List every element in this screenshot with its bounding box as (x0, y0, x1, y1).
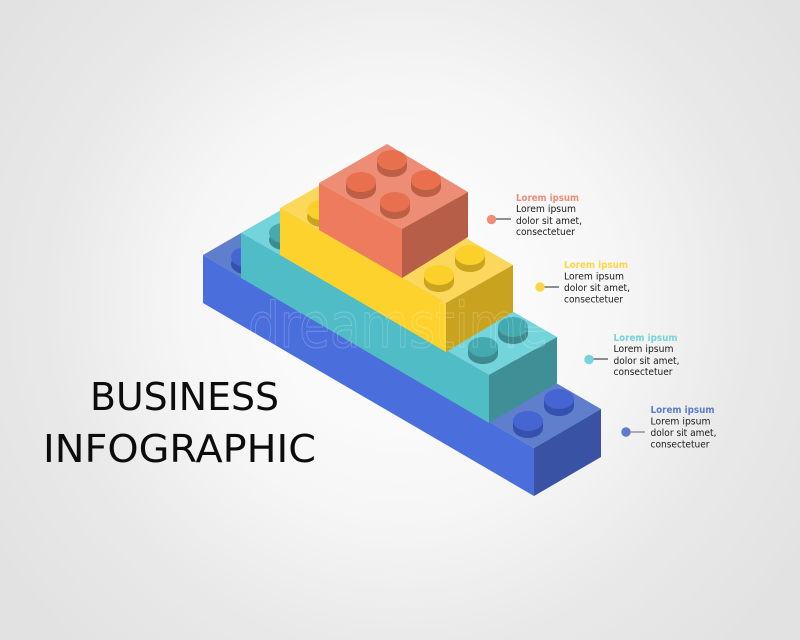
text: teal label: Lorem ipsum (614, 333, 678, 344)
stud: blue front (513, 411, 543, 438)
stud: orange right (411, 170, 441, 197)
text: yellow label: Lorem ipsum (564, 260, 628, 271)
watermark: dreamstime (248, 289, 548, 362)
text: yellow label: Lorem ipsum (564, 272, 624, 282)
stud: orange front (380, 192, 410, 219)
label: orange (487, 193, 582, 238)
text: blue label: Lorem ipsum (650, 405, 714, 416)
title: INFOGRAPHIC (43, 427, 316, 472)
brick: blue base (203, 217, 601, 496)
marker: blue (621, 427, 645, 437)
stud: orange left (346, 172, 376, 199)
stud: teal front (468, 337, 498, 364)
text: blue label: consectetuer (650, 440, 710, 450)
text: orange label: Lorem ipsum (516, 193, 579, 204)
text: orange label: Lorem ipsum (516, 204, 576, 215)
brick: teal (241, 194, 557, 423)
text: blue label: dolor sit amet, (650, 428, 716, 439)
text: teal label: Lorem ipsum (614, 344, 674, 355)
text: blue label (650, 405, 716, 450)
marker: orange (487, 215, 511, 224)
brick: yellow (280, 170, 513, 352)
text: teal label: dolor sit amet, (614, 356, 680, 367)
title (43, 375, 316, 472)
infographic canvas (46, 5, 716, 594)
text: blue label: Lorem ipsum (650, 416, 710, 428)
text: orange label (516, 193, 582, 238)
text: orange label: dolor sit amet, (516, 216, 582, 227)
title: BUSINESS (90, 375, 279, 420)
stud: orange back (377, 150, 407, 177)
stud: yellow back (455, 245, 485, 272)
label: yellow (535, 260, 630, 306)
text: teal label: consectetuer (614, 367, 673, 378)
text: yellow label: consectetuer (564, 294, 624, 306)
label: teal (584, 333, 680, 378)
text: orange label: consectetuer (516, 227, 576, 238)
text: yellow label (564, 260, 630, 306)
stud: teal back (498, 317, 528, 344)
text: teal label (614, 333, 680, 378)
stud: blue back (544, 389, 574, 416)
stud: yellow front (424, 265, 454, 292)
text: yellow label: dolor sit amet, (564, 283, 630, 294)
marker: yellow (535, 282, 559, 292)
brick: orange top (319, 144, 468, 278)
label: blue (621, 405, 716, 450)
marker: teal (584, 355, 608, 364)
